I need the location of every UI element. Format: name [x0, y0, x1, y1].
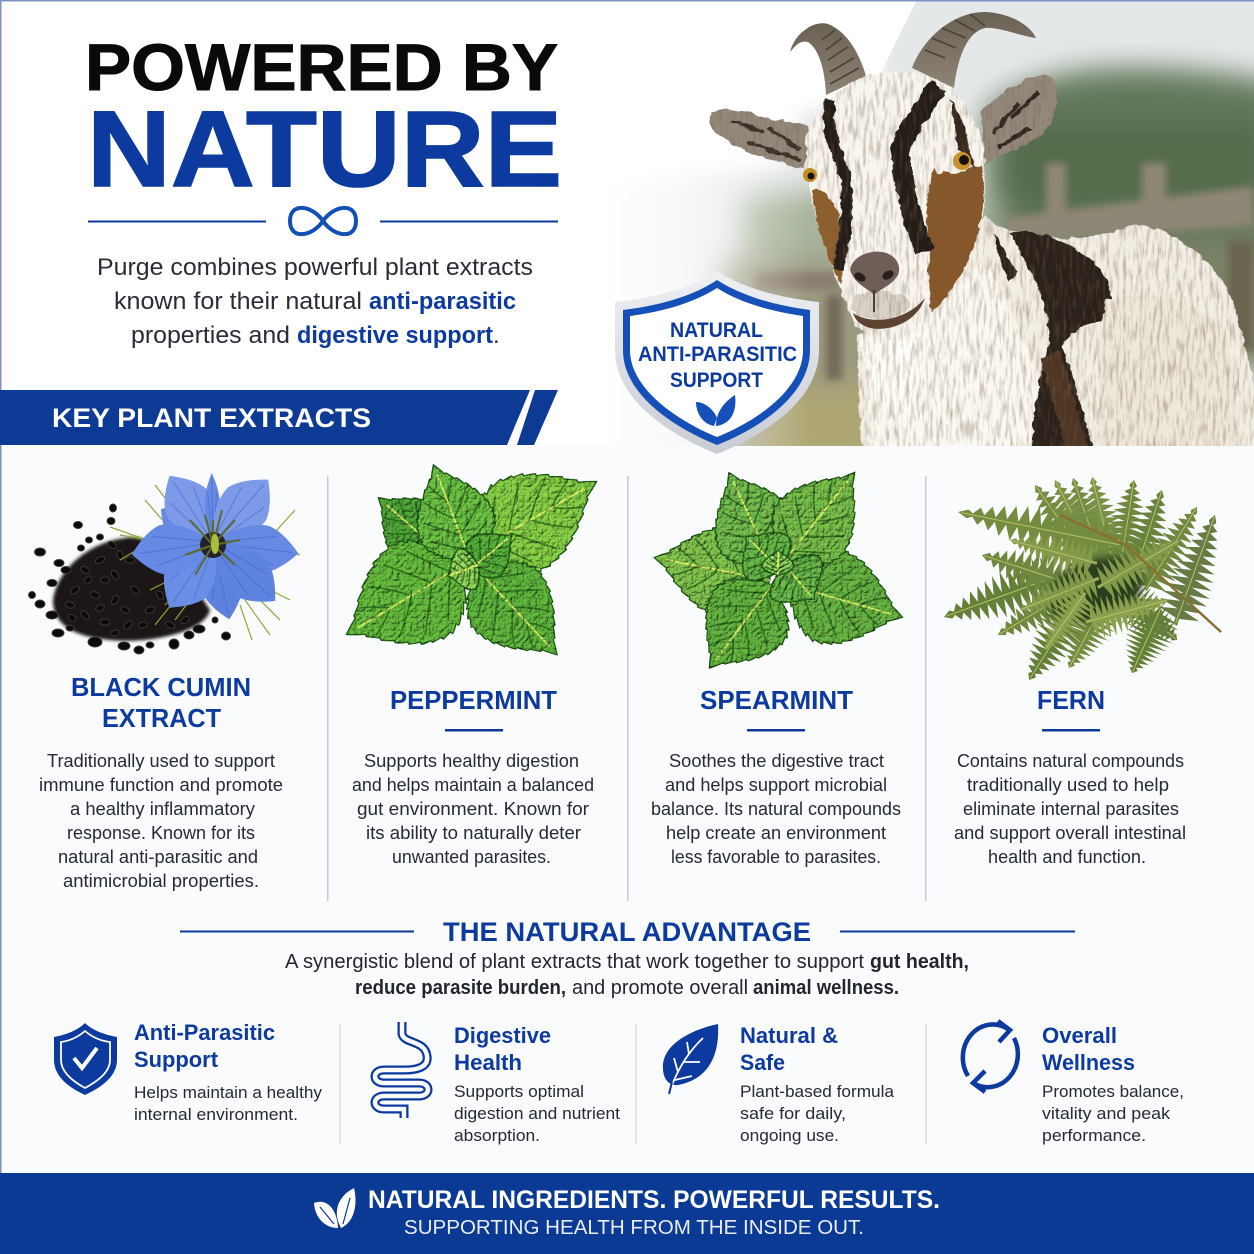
description: black cumin: response. Known for its	[67, 822, 255, 843]
description: fern: and support overall intestinal	[954, 822, 1186, 843]
description: black cumin: Traditionally used to support	[47, 750, 275, 771]
banner: key plant extracts	[0, 390, 558, 445]
intro paragraph: anti-parasitic	[369, 288, 516, 315]
heading underline	[445, 729, 503, 732]
footer banner	[0, 1173, 1254, 1254]
description: digestion and nutrient	[454, 1104, 620, 1123]
heading: fern: FERN	[1037, 685, 1105, 715]
description: fern: Contains natural compounds	[957, 750, 1184, 771]
badge: natural anti-parasitic support: ANTI-PARASITIC	[638, 343, 797, 366]
column: spearmint	[645, 446, 916, 867]
intro paragraph	[97, 254, 533, 349]
column dividers	[327, 476, 926, 901]
title: Support	[134, 1047, 218, 1072]
title	[134, 1020, 275, 1072]
column: peppermint	[318, 438, 622, 867]
title: Wellness	[1042, 1050, 1135, 1075]
icon: intestines	[375, 1022, 428, 1118]
description: performance.	[1042, 1126, 1146, 1145]
image: spearmint leaves	[645, 446, 916, 695]
description: safe for daily,	[740, 1104, 846, 1123]
description: peppermint	[352, 750, 594, 867]
description: fern: traditionally used to help	[967, 774, 1169, 795]
benefit dividers	[340, 1024, 927, 1144]
badge: natural anti-parasitic support	[615, 271, 819, 454]
benefit: overall wellness	[963, 1021, 1184, 1145]
heading: black cumin extract	[71, 672, 251, 733]
advantage paragraph: reduce parasite burden,	[355, 977, 566, 999]
badge: natural anti-parasitic support: NATURAL	[670, 319, 763, 342]
advantage paragraph: A synergistic blend of plant extracts that work together to support	[285, 951, 864, 973]
description: black cumin: immune function and promote	[39, 774, 283, 795]
badge: natural anti-parasitic support: SUPPORT	[670, 369, 763, 392]
divider with infinity icon	[88, 208, 558, 234]
goat ears	[709, 74, 1057, 168]
description: fern: health and function.	[988, 846, 1146, 867]
title: powered by nature: POWERED BY	[85, 30, 558, 104]
title: Digestive	[454, 1023, 551, 1048]
column: fern	[935, 470, 1238, 867]
heading: black cumin extract: EXTRACT	[102, 703, 221, 733]
description: spearmint: help create an environment	[666, 822, 886, 843]
benefit: anti-parasitic support	[54, 1020, 322, 1124]
title: Safe	[740, 1050, 785, 1075]
description	[454, 1082, 620, 1145]
description: Helps maintain a healthy	[134, 1083, 322, 1102]
heading: peppermint: PEPPERMINT	[390, 685, 557, 715]
goat eyes	[803, 152, 971, 182]
icon: leaf	[663, 1024, 718, 1094]
black seeds pile	[28, 504, 230, 654]
description: peppermint: unwanted parasites.	[392, 846, 551, 867]
title: Natural &	[740, 1023, 838, 1048]
goat body	[857, 215, 1254, 456]
badge leaf icon	[696, 395, 735, 426]
description: internal environment.	[134, 1105, 298, 1124]
title: Overall	[1042, 1023, 1117, 1048]
title	[454, 1023, 551, 1075]
description: fern: eliminate internal parasites	[963, 798, 1179, 819]
description: spearmint: balance. Its natural compounds	[651, 798, 901, 819]
advantage paragraph	[285, 951, 969, 999]
column: black cumin	[28, 463, 301, 891]
banner: key plant extracts: KEY PLANT EXTRACTS	[52, 403, 371, 433]
heading underline	[1042, 729, 1100, 732]
goat nose and mouth	[850, 252, 925, 329]
image: fern fronds	[935, 470, 1238, 694]
heading: spearmint: SPEARMINT	[700, 685, 853, 715]
icon: shield with check	[54, 1023, 117, 1095]
advantage paragraph: animal wellness.	[753, 977, 899, 999]
goat horns	[790, 12, 1036, 95]
description: spearmint	[651, 750, 901, 867]
description	[134, 1083, 322, 1124]
description: vitality and peak	[1042, 1104, 1171, 1123]
intro paragraph: known for their natural	[114, 288, 362, 315]
description: Plant-based formula	[740, 1082, 895, 1101]
heading: black cumin extract: BLACK CUMIN	[71, 672, 251, 702]
description: black cumin	[39, 750, 283, 891]
title: powered by nature: NATURE	[87, 88, 562, 209]
intro paragraph: digestive support	[297, 322, 493, 349]
description: black cumin: a healthy inflammatory	[70, 798, 256, 819]
intro paragraph: .	[493, 322, 500, 349]
description: Promotes balance,	[1042, 1082, 1184, 1101]
benefit: natural and safe	[663, 1023, 895, 1145]
description: peppermint: and helps maintain a balanced	[352, 774, 594, 795]
sub tagline: SUPPORTING HEALTH FROM THE INSIDE OUT.	[404, 1217, 864, 1239]
image: peppermint leaves	[318, 438, 622, 685]
image: black seeds and blue flower	[28, 463, 301, 654]
tagline: NATURAL INGREDIENTS. POWERFUL RESULTS.	[368, 1186, 940, 1214]
description	[1042, 1082, 1184, 1145]
flower threads	[110, 485, 300, 640]
description: fern	[954, 750, 1186, 867]
flower center	[185, 510, 240, 575]
description	[740, 1082, 895, 1145]
description: ongoing use.	[740, 1126, 839, 1145]
title: powered by nature	[85, 30, 562, 209]
description: peppermint: gut environment. Known for	[357, 798, 589, 819]
title: Anti-Parasitic	[134, 1020, 275, 1045]
blue flower petals	[128, 463, 301, 623]
goat head	[806, 72, 985, 341]
description: peppermint: its ability to naturally deter	[366, 822, 581, 843]
icon: cycle arrows	[963, 1021, 1018, 1092]
intro paragraph: properties and	[131, 322, 290, 349]
description: spearmint: less favorable to parasites.	[671, 846, 881, 867]
intro paragraph: Purge combines powerful plant extracts	[97, 254, 533, 281]
goat	[709, 12, 1254, 456]
description: Supports optimal	[454, 1082, 584, 1101]
title	[740, 1023, 838, 1075]
title: Health	[454, 1050, 522, 1075]
advantage paragraph: gut health,	[870, 951, 969, 973]
icon: white leaves	[314, 1188, 355, 1228]
benefit: digestive health	[375, 1022, 620, 1145]
blurred farm background	[686, 2, 1254, 446]
description: peppermint: Supports healthy digestion	[364, 750, 579, 771]
advantage paragraph: and promote overall	[572, 977, 748, 999]
description: spearmint: and helps support microbial	[665, 774, 887, 795]
description: spearmint: Soothes the digestive tract	[669, 750, 884, 771]
title	[1042, 1023, 1135, 1075]
description: black cumin: antimicrobial properties.	[63, 870, 259, 891]
heading underline	[747, 729, 805, 732]
heading: the natural advantage: THE NATURAL ADVANTAGE	[443, 917, 811, 947]
description: absorption.	[454, 1126, 540, 1145]
description: black cumin: natural anti-parasitic and	[58, 846, 258, 867]
photo panel: goat in field	[686, 2, 1254, 446]
